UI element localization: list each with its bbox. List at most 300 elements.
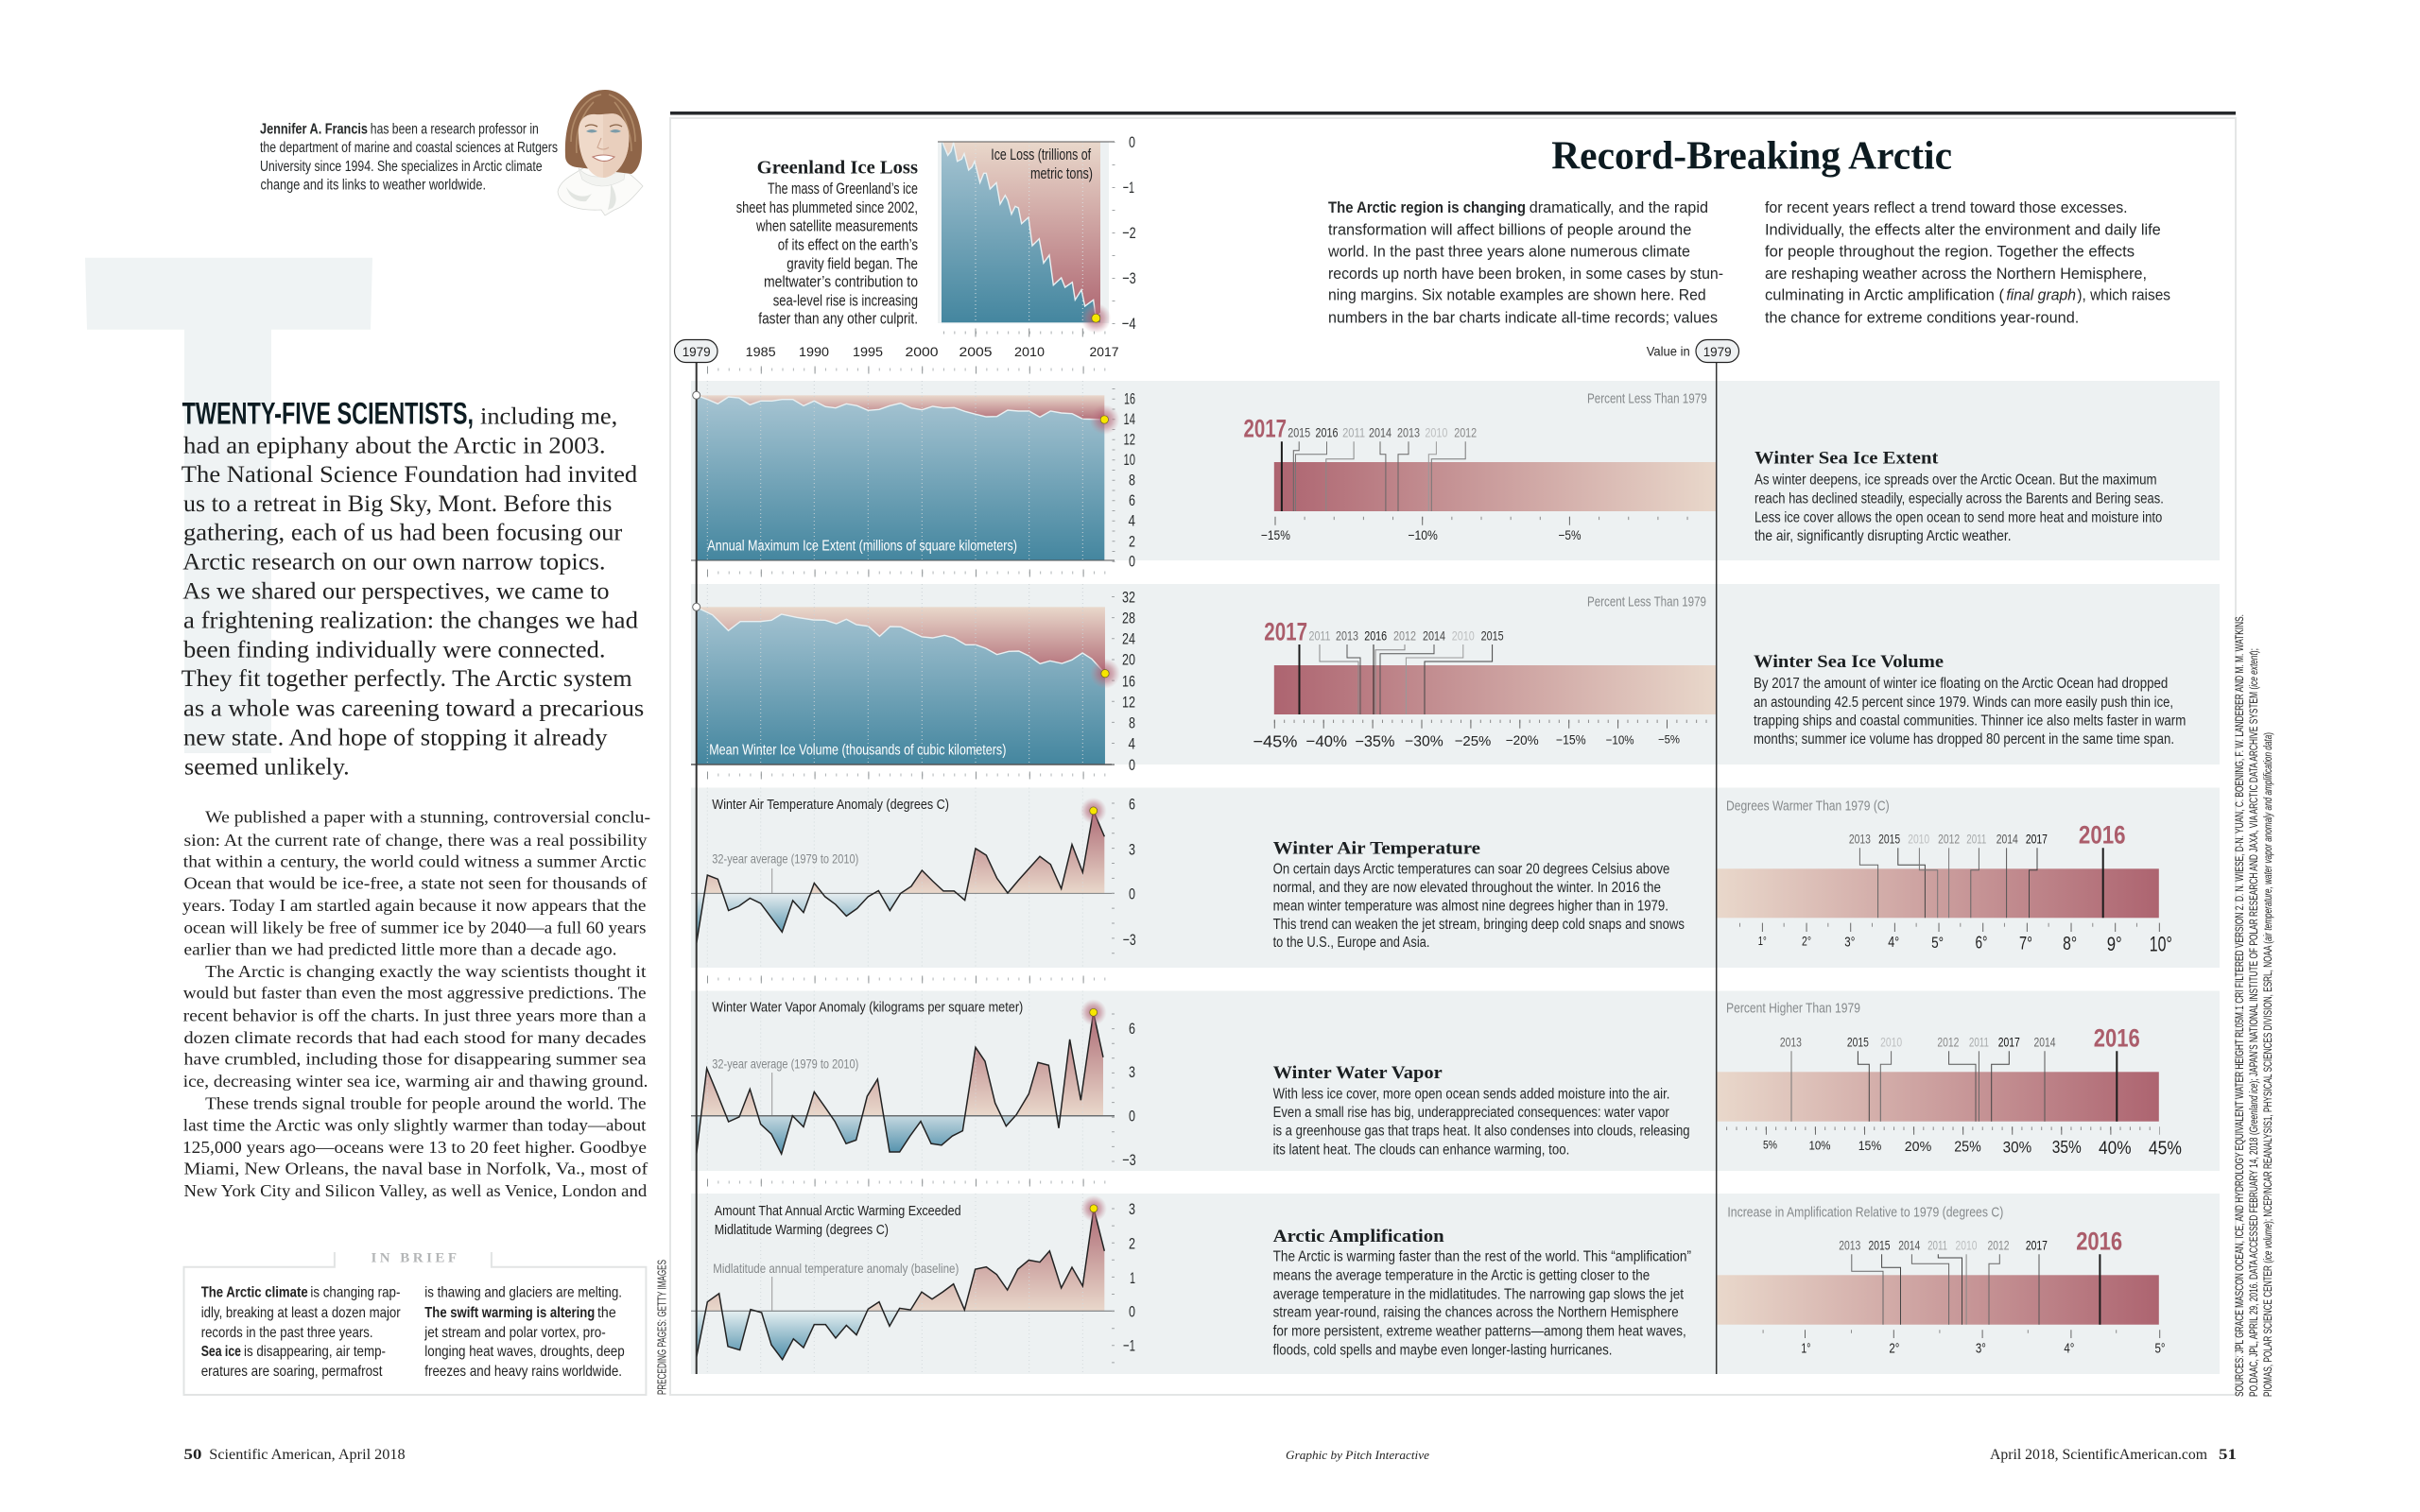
panel frame (670, 112, 2236, 1395)
average annotation: 32-year average (1979 to 2010) (712, 1057, 858, 1072)
greenland description: sheet has plummeted since 2002, (736, 198, 918, 216)
baseline annotation: Midlatitude annual temperature anomaly (baseline) (713, 1261, 959, 1276)
air temp y axis (1123, 795, 1136, 949)
axis labels: 4° (2064, 1341, 2074, 1357)
article body text: earlier than we had predicted little more than a decade ago. (183, 940, 616, 959)
greenland axis labels (1122, 133, 1136, 333)
ice extent y axis: 8 (1129, 471, 1135, 489)
in brief text: The swift warming is altering (424, 1305, 595, 1321)
lead paragraph: as a whole was careening toward a precarious (183, 696, 644, 721)
year labels: 2016 (1364, 628, 1387, 644)
year labels: 2010 (1880, 1035, 1902, 1050)
footer left: Scientific American, April 2018 (209, 1447, 406, 1463)
panel: greenland ice loss text (736, 157, 918, 327)
ice volume y axis (1122, 589, 1135, 774)
greenland axis labels: −2 (1122, 224, 1136, 242)
author bio: the department of marine and coastal sciences at Rutgers (260, 140, 558, 156)
in brief text: Sea ice (201, 1344, 241, 1360)
ice volume y axis: 28 (1122, 609, 1135, 627)
lead paragraph: Arctic research on our own narrow topics. (182, 550, 606, 576)
bar chart: winter sea ice extent (1244, 391, 1717, 542)
year labels: 2015 (1878, 832, 1900, 847)
year axis: 2010 (1014, 344, 1045, 359)
bar chart: winter air temperature (1717, 799, 2172, 956)
year labels: 2017 (2026, 1238, 2048, 1253)
description: Even a small rise has big, underappreciated consequences: water vapor (1273, 1105, 1669, 1121)
greenland axis labels: −3 (1122, 269, 1136, 287)
heading: greenland ice loss: Greenland Ice Loss (757, 157, 918, 178)
description: The Arctic is warming faster than the rest of the world. This “amplification” (1273, 1248, 1691, 1264)
description: is a greenhouse gas that traps heat. It also condenses into clouds, releasing (1273, 1124, 1690, 1140)
axis labels (1758, 932, 2172, 956)
ice extent y axis: 4 (1129, 512, 1135, 530)
year labels (1849, 832, 2048, 847)
description: an astounding 42.5 percent since 1979. Winds can more easily push thin ice, (1754, 695, 2173, 711)
author bio: University since 1994. She specializes in Arctic climate (260, 159, 543, 175)
axis labels: −10% (1408, 527, 1438, 542)
amplification y axis (1123, 1200, 1135, 1355)
greenland description: gravity field began. The (786, 254, 918, 272)
intro text: dramatically, and the rapid (1530, 198, 1708, 216)
text: arctic amplification: Arctic Amplification (1273, 1227, 1444, 1246)
water vapor label: Winter Water Vapor Anomaly (kilograms per square meter) (712, 999, 1023, 1015)
greenland axis title (991, 146, 1093, 182)
article body text: The Arctic is changing exactly the way scientists thought it (205, 962, 646, 981)
axis labels: 10° (2150, 932, 2172, 956)
article body text: would but faster than even the most aggressive predictions. The (183, 984, 647, 1003)
year axis: 2000 (906, 344, 939, 359)
description (1273, 861, 1685, 951)
axis labels: 2° (1889, 1341, 1899, 1357)
year labels: 2015 (1288, 425, 1310, 440)
ice extent y axis: 0 (1129, 552, 1135, 570)
record marker (1080, 798, 1107, 824)
axis labels: 3° (1844, 934, 1855, 951)
greenland axis labels: 0 (1129, 133, 1135, 151)
article body text: that within a century, the world could witness a summer Arctic (183, 851, 647, 870)
air temp y axis: −3 (1123, 931, 1136, 949)
lead paragraph: TWENTY-FIVE SCIENTISTS, (182, 396, 474, 430)
axis labels: −30% (1405, 733, 1443, 750)
axis note: Percent Less Than 1979 (1587, 391, 1707, 407)
intro text: world. In the past three years alone numerous climate (1327, 243, 1690, 261)
year axis: 2017 (1089, 344, 1119, 359)
description: means the average temperature in the Arctic is getting closer to the (1273, 1267, 1650, 1283)
article body text: 125,000 years ago—oceans were 13 to 20 feet higher. Goodbye (182, 1138, 647, 1157)
article body text: Miami, New Orleans, the naval base in Norfolk, Va., most of (183, 1160, 648, 1178)
year axis: 2005 (959, 344, 993, 359)
description: to the U.S., Europe and Asia. (1273, 935, 1429, 951)
description: normal, and they are now elevated throughout the winter. In 2016 the (1273, 880, 1661, 896)
description (1273, 1248, 1691, 1358)
text: winter air temperature: Winter Air Temperature (1273, 838, 1480, 858)
axis labels: −40% (1306, 732, 1347, 750)
year labels: 2011 (1342, 425, 1365, 440)
text: winter sea ice volume: Winter Sea Ice Volume (1754, 652, 1944, 672)
article body text: recent behavior is off the charts. In just three years more than a (183, 1006, 647, 1025)
axis labels: 10% (1809, 1138, 1831, 1152)
article body text (182, 808, 650, 1200)
description: stream year-round, raising the chances across the Northern Hemisphere (1273, 1305, 1679, 1321)
axis labels: −15% (1261, 527, 1290, 542)
year labels: 2015 (1847, 1035, 1869, 1050)
greenland description: sea-level rise is increasing (773, 291, 918, 309)
water vapor y axis: 3 (1129, 1063, 1135, 1081)
description: reach has declined steadily, especially across the Barents and Bering seas. (1754, 491, 2164, 507)
year labels: 2017 (1998, 1035, 2020, 1050)
bar chart: winter sea ice volume (1253, 594, 1717, 751)
chart: mean winter ice volume (691, 584, 1135, 774)
description: months; summer ice volume has dropped 80 percent in the same time span. (1754, 731, 2174, 747)
year labels: 2013 (1780, 1035, 1802, 1050)
text: winter air temperature (1273, 838, 1685, 951)
year labels: 2012 (1938, 832, 1960, 847)
year labels: 2010 (1908, 832, 1929, 847)
year labels: 2013 (1397, 425, 1420, 440)
pill: value in 1979: Value in (1647, 344, 1690, 359)
axis labels: −5% (1658, 733, 1680, 747)
ice volume y axis: 24 (1122, 630, 1135, 648)
year labels: 2014 (1423, 628, 1445, 644)
in brief text: The Arctic climate (201, 1285, 308, 1301)
author bio: change and its links to weather worldwide. (261, 178, 486, 194)
year labels: 2010 (1425, 425, 1448, 440)
greenland description: of its effect on the earth’s (778, 235, 918, 253)
amplification y axis: 2 (1129, 1235, 1135, 1253)
description: mean winter temperature was almost nine degrees higher than in 1979. (1273, 898, 1668, 914)
ice extent y axis: 12 (1123, 430, 1135, 448)
axis labels: 25% (1954, 1140, 1981, 1156)
record marker (1080, 1195, 1107, 1222)
text: winter sea ice extent: Winter Sea Ice Extent (1754, 449, 1939, 469)
start markers (693, 391, 700, 610)
footer left: 50 (183, 1447, 201, 1463)
description (1754, 676, 2186, 747)
description (1273, 1087, 1690, 1159)
ice volume y axis: 32 (1122, 589, 1135, 607)
article body text: Ocean that would be ice-free, a state not seen for thousands of (183, 874, 647, 893)
chart: annual maximum ice extent (691, 381, 1135, 570)
water vapor y axis: −3 (1122, 1151, 1136, 1169)
description: By 2017 the amount of winter ice floating on the Arctic Ocean had dropped (1754, 676, 2168, 692)
footer center: Graphic by Pitch Interactive (1286, 1448, 1429, 1462)
chart: winter air temperature anomaly (691, 788, 1136, 968)
axis labels: 6° (1976, 934, 1987, 953)
air temp label: Winter Air Temperature Anomaly (degrees C) (712, 797, 949, 813)
pill: 1979 start: 1979 (683, 344, 711, 359)
year labels: 2010 (1452, 628, 1475, 644)
intro text: are reshaping weather across the Northern Hemisphere, (1765, 265, 2147, 283)
sources credit (2233, 614, 2274, 1397)
article body text: have crumbled, including those for disappearing summer sea (183, 1050, 647, 1069)
record year: 2017 (1244, 415, 1287, 443)
intro text: the chance for extreme conditions year-round. (1765, 309, 2079, 327)
description: As winter deepens, ice spreads over the Arctic Ocean. But the maximum (1754, 472, 2157, 488)
axis note: Degrees Warmer Than 1979 (C) (1726, 799, 1890, 815)
year axis: 1985 (746, 344, 776, 359)
pill: value in 1979 (1647, 340, 1739, 363)
year labels: 2011 (1969, 1035, 1989, 1050)
intro text (1327, 198, 2170, 327)
ice volume y axis: 0 (1129, 756, 1135, 774)
average annotation: 32-year average (1979 to 2010) (712, 850, 858, 866)
axis labels (1253, 732, 1680, 751)
greenland description: The mass of Greenland’s ice (768, 180, 918, 198)
ice extent y axis (1123, 390, 1135, 570)
axis line: 1979 timeline (696, 362, 698, 1374)
record year: 2017 (1264, 618, 1307, 646)
description (1754, 472, 2164, 544)
article body text: last time the Arctic was only slightly warmer than today—about (183, 1116, 647, 1135)
axis labels: −20% (1506, 732, 1539, 747)
axis labels: −5% (1558, 527, 1581, 542)
axis labels: 5% (1763, 1139, 1777, 1152)
greenland description: meltwater’s contribution to (764, 272, 918, 290)
description: its latent heat. The clouds can enhance warming, too. (1273, 1143, 1569, 1159)
pill: value in 1979: 1979 (1703, 344, 1732, 359)
record year: 2016 (2076, 1227, 2122, 1255)
sources credit: SOURCES: JPL GRACE MASCON OCEAN, ICE, AND HYDROLOGY EQUIVALENT WATER HEIGHT RL05M.1 CRI FILTERED VERSION 2. D. N. WIESE, D-N. YUAN, C. BOENING, F. W. LANDERER AND M. M. WATKINS. (2233, 614, 2246, 1397)
lead paragraph: us to a retreat in Big Sky, Mont. Before this (183, 491, 612, 517)
chart: winter water vapor anomaly (691, 990, 1136, 1171)
axis labels: 8° (2063, 934, 2077, 954)
ice extent y axis: 16 (1124, 390, 1135, 408)
year labels: 2013 (1839, 1238, 1860, 1253)
axis labels: 5° (2155, 1341, 2165, 1357)
year axis (746, 344, 1119, 359)
water vapor y axis: 0 (1129, 1108, 1135, 1125)
ice extent label: Annual Maximum Ice Extent (millions of square kilometers) (707, 539, 1017, 555)
footer right: April 2018, ScientificAmerican.com (1990, 1447, 2208, 1463)
axis labels: −25% (1455, 733, 1491, 749)
intro text: The Arctic region is changing (1328, 198, 1526, 216)
axis labels: −45% (1253, 732, 1297, 751)
article body text: ocean will likely be free of summer ice by 2040—a full 60 years (183, 918, 647, 936)
ice volume y axis: 4 (1129, 735, 1135, 753)
ice volume y axis: 12 (1122, 694, 1135, 712)
lead paragraph: The National Science Foundation had invited (182, 462, 638, 488)
description: trapping ships and coastal communities. Thinner ice also melts faster in warm (1754, 713, 2186, 730)
author bio (260, 122, 558, 194)
lead paragraph (182, 396, 644, 780)
chart: arctic amplification (691, 1194, 1135, 1374)
intro text: transformation will affect billions of people around the (1328, 221, 1691, 239)
ice extent y axis: 10 (1123, 451, 1135, 469)
in brief text: is changing rap- (310, 1285, 400, 1301)
text: winter sea ice volume (1754, 652, 2186, 747)
panel: in brief (183, 1251, 646, 1395)
icon: author portrait (558, 90, 643, 215)
article body text: years. Today I am startled again because it now appears that the (182, 896, 646, 915)
water vapor y axis: 6 (1129, 1020, 1135, 1038)
axis labels: 35% (2052, 1138, 2082, 1157)
year ticks (707, 369, 1106, 1183)
axis labels: 40% (2099, 1139, 2132, 1159)
water vapor y axis (1122, 1020, 1136, 1169)
ice extent y axis: 14 (1123, 410, 1135, 428)
lead paragraph: gathering, each of us had been focusing our (183, 521, 623, 546)
footer right: 51 (2219, 1447, 2237, 1463)
record year: 2016 (2079, 821, 2126, 850)
author bio: Jennifer A. Francis (260, 122, 368, 138)
year labels (1308, 628, 1504, 644)
article body text: dozen climate records that had each stood for many decades (183, 1028, 647, 1047)
in brief text: longing heat waves, droughts, deep (424, 1344, 625, 1360)
year labels: 2014 (1369, 425, 1392, 440)
lead paragraph: had an epiphany about the Arctic in 2003. (183, 433, 605, 458)
lead paragraph: been finding individually were connected. (183, 637, 605, 662)
year axis: 1995 (853, 344, 883, 359)
axis labels: 1° (1801, 1341, 1810, 1357)
description: average temperature in the midlatitudes. The narrowing gap slows the jet (1273, 1286, 1685, 1302)
amplification label (715, 1203, 961, 1238)
ice volume y axis: 8 (1129, 714, 1135, 732)
in brief text: the (597, 1305, 616, 1321)
greenland axis title: metric tons) (1030, 164, 1093, 182)
axis labels: 45% (2149, 1139, 2182, 1160)
sources credit: PIOMAS, POLAR SCIENCE CENTER (ice volume); NCEP/NCAR REANALYSIS1, PHYSICAL SCIENCES DIVISION, ESRL, NOAA (air temperature, water vapor anomaly and amplification data) (2261, 732, 2274, 1397)
greenland description: when satellite measurements (755, 216, 918, 234)
year labels: 2011 (1927, 1238, 1947, 1253)
axis labels: 15% (1858, 1138, 1881, 1153)
lead paragraph: As we shared our perspectives, we came to (182, 578, 610, 604)
axis note: Percent Higher Than 1979 (1726, 1001, 1860, 1017)
year labels: 2012 (1454, 425, 1477, 440)
record marker (1089, 404, 1119, 435)
year labels: 2012 (1937, 1035, 1960, 1050)
description: the air, significantly disrupting Arctic weather. (1754, 528, 2012, 544)
axis labels: 30% (2003, 1138, 2031, 1156)
axis labels: 4° (1888, 935, 1899, 951)
intro text: Individually, the effects alter the environment and daily life (1765, 221, 2161, 239)
bar chart: arctic amplification (1717, 1204, 2165, 1357)
in brief heading: IN BRIEF (371, 1251, 457, 1266)
author bio: has been a research professor in (371, 122, 539, 138)
article body text: sion: At the current rate of change, there was a real possibility (183, 831, 647, 850)
year labels: 2016 (1316, 425, 1339, 440)
photo credit: PRECEDING PAGES: GETTY IMAGES (656, 1260, 669, 1395)
in brief text: eratures are soaring, permafrost (201, 1364, 383, 1380)
description: With less ice cover, more open ocean sends added moisture into the air. (1273, 1087, 1669, 1103)
record year: 2016 (2094, 1024, 2140, 1053)
amplification label: Midlatitude Warming (degrees C) (715, 1222, 889, 1238)
pill: 1979 start (675, 340, 717, 363)
greenland axis labels: −4 (1122, 315, 1136, 333)
article body text: ice, decreasing winter sea ice, warming air and thawing ground. (183, 1072, 648, 1091)
description: Less ice cover allows the open ocean to send more heat and moisture into (1754, 510, 2162, 525)
bar chart: winter water vapor (1717, 1001, 2182, 1160)
in brief text: jet stream and polar vortex, pro- (424, 1325, 606, 1341)
axis labels (1801, 1341, 2165, 1357)
intro text: for people throughout the region. Together the effects (1765, 243, 2135, 261)
chart: greenland ice loss (938, 133, 1136, 336)
axis note: Percent Less Than 1979 (1587, 594, 1706, 610)
in brief text: idly, breaking at least a dozen major (201, 1305, 401, 1321)
year labels: 2012 (1393, 628, 1416, 644)
text: winter sea ice extent (1754, 449, 2164, 544)
in brief text: freezes and heavy rains worldwide. (424, 1364, 622, 1380)
axis labels: 1° (1758, 934, 1767, 948)
axis labels: 2° (1802, 934, 1811, 949)
panel: row backgrounds (691, 381, 2220, 1374)
amplification y axis: 3 (1129, 1200, 1135, 1218)
amplification y axis: −1 (1123, 1336, 1135, 1355)
greenland description: faster than any other culprit. (758, 309, 918, 327)
year labels: 2015 (1868, 1238, 1891, 1253)
article body text: These trends signal trouble for people around the world. The (205, 1093, 647, 1112)
in brief text: is disappearing, air temp- (244, 1344, 386, 1360)
text: winter water vapor (1273, 1063, 1690, 1159)
axis labels: −15% (1556, 733, 1586, 747)
ice extent y axis: 2 (1129, 532, 1135, 550)
axis labels: −35% (1355, 733, 1395, 750)
axis labels: −10% (1606, 732, 1634, 747)
description: floods, cold spells and maybe even longer-lasting hurricanes. (1273, 1342, 1612, 1358)
amplification label: Amount That Annual Arctic Warming Exceeded (715, 1203, 961, 1219)
year labels: 2012 (1987, 1238, 2010, 1253)
year labels (1780, 1035, 2056, 1050)
year labels (1288, 425, 1477, 440)
axis labels: 20% (1905, 1139, 1931, 1155)
air temp y axis: 6 (1129, 795, 1135, 813)
lead paragraph: a frightening realization: the changes we had (183, 608, 639, 633)
in brief text: is thawing and glaciers are melting. (424, 1285, 622, 1301)
axis labels: 7° (2019, 934, 2032, 954)
description: for more persistent, extreme weather patterns—among them heat waves, (1273, 1324, 1686, 1340)
title: Record-Breaking Arctic (1551, 134, 1952, 178)
greenland axis labels: −1 (1123, 179, 1134, 197)
intro text: ning margins. Six notable examples are shown here. Red (1328, 286, 1706, 304)
axis line: value in 1979 (1716, 362, 1718, 1374)
amplification y axis: 1 (1130, 1269, 1135, 1287)
intro text: ), which raises (2077, 286, 2170, 304)
year labels: 2017 (2026, 832, 2048, 847)
year labels: 2013 (1336, 628, 1358, 644)
description: This trend can weaken the jet stream, bringing deep cold snaps and snows (1273, 917, 1685, 933)
intro text: culminating in Arctic amplification ( (1765, 286, 2004, 304)
record marker (1090, 659, 1120, 689)
intro text: for recent years reflect a trend toward those excesses. (1765, 198, 2128, 216)
text: winter water vapor: Winter Water Vapor (1273, 1063, 1443, 1083)
in brief text: records in the past three years. (201, 1325, 372, 1341)
intro text: records up north have been broken, in some cases by stun- (1328, 265, 1723, 283)
air temp y axis: 0 (1129, 885, 1135, 902)
ice volume y axis: 16 (1122, 673, 1135, 691)
article body text: New York City and Silicon Valley, as well as Venice, London and (183, 1181, 647, 1200)
axis labels (1261, 527, 1581, 542)
intro text: final graph (2006, 286, 2076, 304)
lead paragraph: new state. And hope of stopping it already (183, 725, 608, 750)
ice volume y axis: 20 (1122, 650, 1135, 668)
drop cap letter T (85, 258, 372, 753)
axis labels: 9° (2107, 934, 2122, 955)
axis labels (1763, 1138, 2182, 1160)
year labels: 2015 (1481, 628, 1504, 644)
in brief text (201, 1285, 625, 1380)
year labels: 2013 (1849, 832, 1871, 847)
lead paragraph: including me, (480, 404, 617, 429)
axis note: Increase in Amplification Relative to 1979 (degrees C) (1727, 1204, 2003, 1220)
air temp y axis: 3 (1129, 840, 1135, 858)
text: arctic amplification (1273, 1227, 1691, 1358)
axis labels: 5° (1931, 934, 1944, 952)
record marker (1080, 999, 1107, 1025)
article body text: We published a paper with a stunning, controversial conclu- (205, 808, 650, 827)
record marker (1080, 303, 1111, 334)
ice extent y axis: 6 (1129, 491, 1135, 509)
year labels: 2010 (1955, 1238, 1978, 1253)
greenland axis title: Ice Loss (trillions of (991, 146, 1091, 163)
